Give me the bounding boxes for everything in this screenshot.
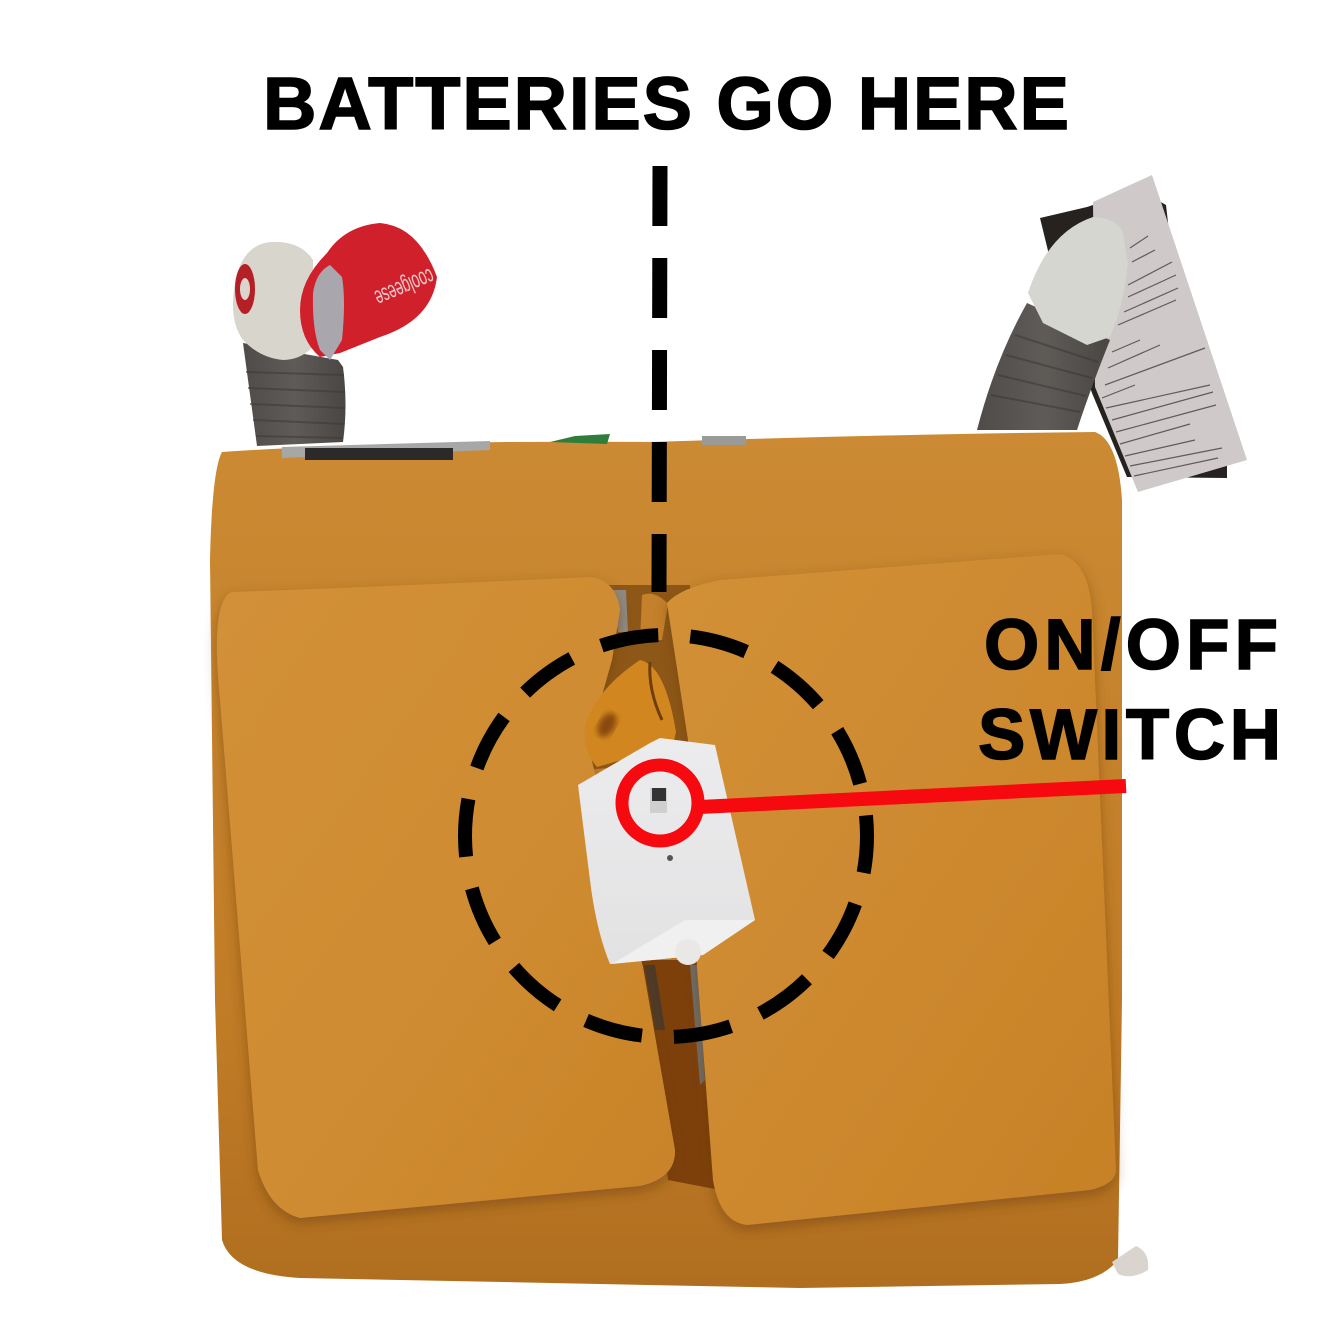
gap between pockets (585, 585, 720, 1190)
on/off red pointer and ring (622, 765, 1126, 841)
plush right arm with white hand (977, 217, 1128, 430)
on/off switch label: ON/OFF (984, 606, 1278, 685)
plush red mitten: coolgeese (371, 262, 438, 312)
tag card behind right arm (1040, 175, 1247, 492)
plush left arm with white hand (233, 242, 346, 446)
plush back body (210, 432, 1148, 1288)
batteries dashed leader line (659, 166, 660, 592)
electronic sound box (578, 738, 755, 965)
right front pocket (667, 554, 1116, 1225)
title: BATTERIES GO HERE (263, 62, 1069, 145)
left front pocket (217, 577, 675, 1218)
plush inner pull-out flap (584, 660, 676, 767)
on/off switch label: SWITCH (978, 696, 1281, 775)
plush red mitten (300, 223, 438, 360)
dashed circle around the switch (465, 635, 867, 1037)
on/off switch label (978, 606, 1281, 775)
